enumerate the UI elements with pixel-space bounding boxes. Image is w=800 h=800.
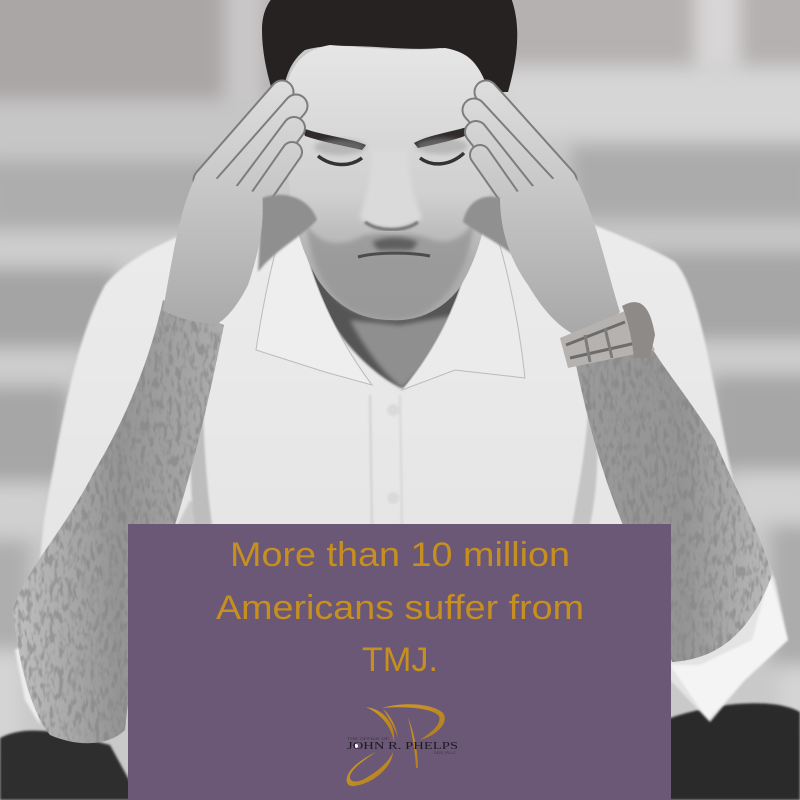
logo: John R. Phelps monogram: DDS, PLLC: [434, 751, 457, 755]
logo: John R. Phelps monogram: THE OFFICE OF: [347, 736, 390, 741]
jeans: [0, 703, 800, 800]
collar: [256, 225, 525, 390]
headline text: More than 10 million: [230, 536, 570, 574]
headline text: [216, 536, 584, 679]
left forearm: [13, 300, 224, 743]
right hand: [463, 92, 620, 335]
mouth: [358, 238, 430, 269]
neck shadow: [305, 255, 475, 388]
right forearm: [575, 345, 772, 662]
logo: John R. Phelps monogram: [347, 704, 458, 786]
panel: purple text box: [128, 524, 671, 800]
headline text: Americans suffer from: [216, 589, 584, 627]
hair: [262, 0, 517, 95]
face: [285, 45, 492, 320]
stubble: [306, 222, 474, 320]
shirt body and sleeves: [15, 185, 788, 725]
logo: John R. Phelps monogram: JOHN R. PHELPS: [347, 741, 458, 752]
left hand: [163, 92, 317, 325]
brows and eyes: [302, 124, 476, 165]
nose shading: [360, 150, 422, 228]
headline text: TMJ.: [362, 641, 438, 679]
watch: [560, 302, 655, 368]
